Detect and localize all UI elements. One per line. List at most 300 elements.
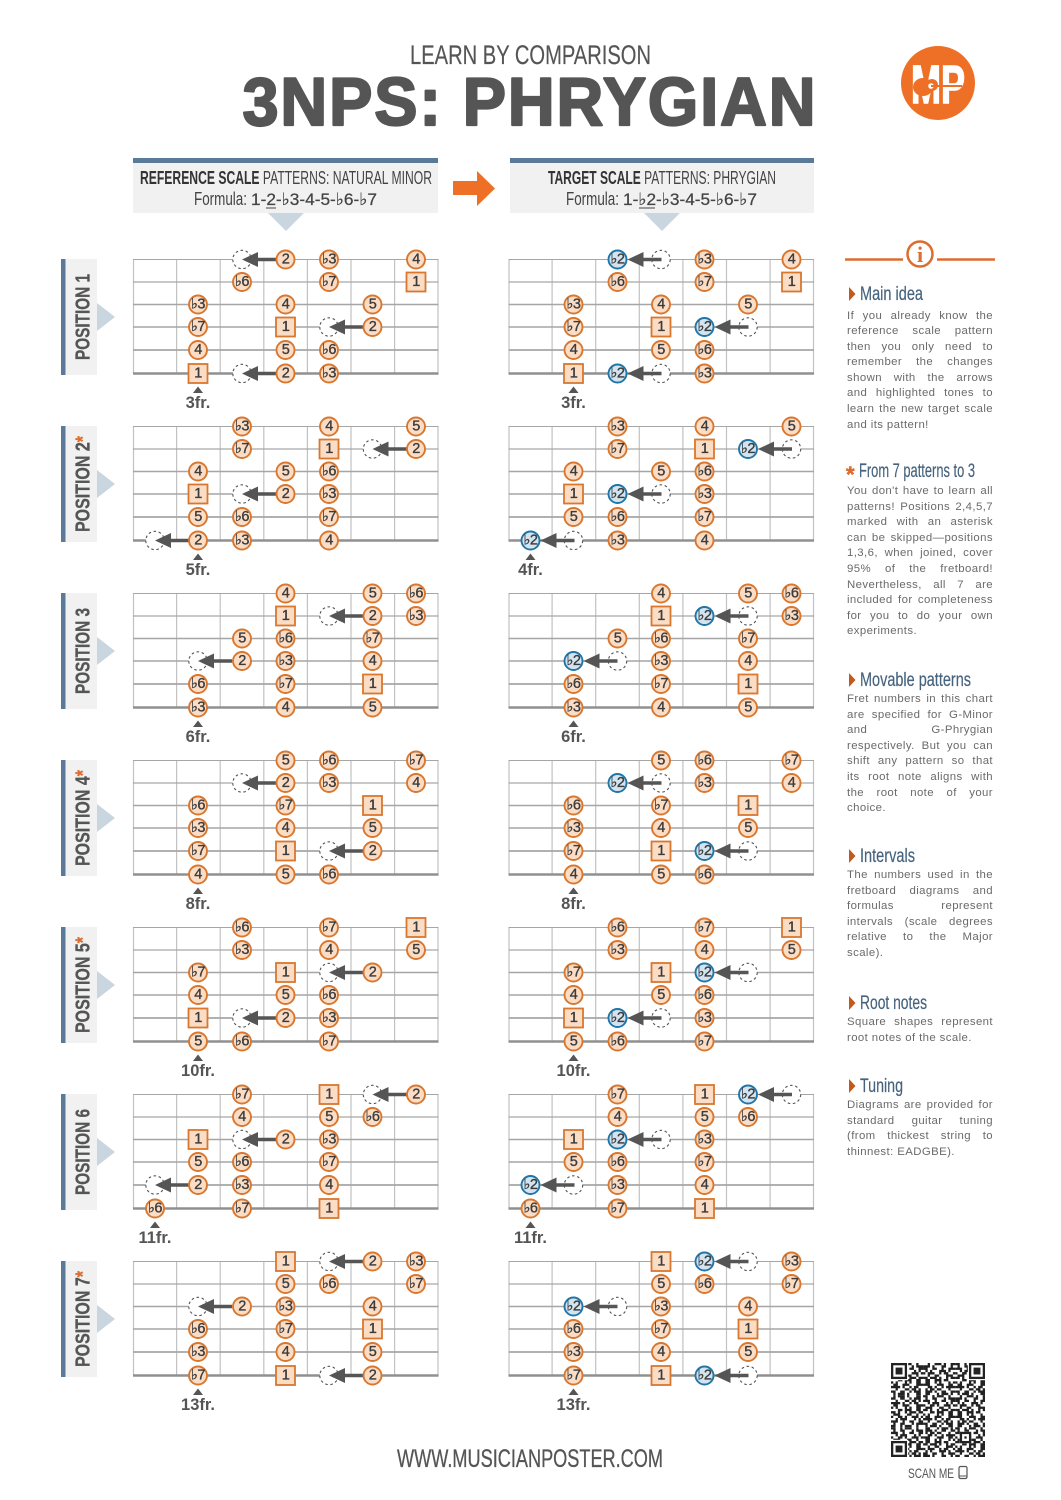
notes: ♭7 [191, 843, 205, 859]
notes: ♭2 [611, 1132, 625, 1148]
text: main idea: reference scale pattern [847, 325, 993, 337]
text: intervals: fretboard diagrams and [847, 885, 993, 897]
notes: ♭6 [611, 920, 625, 936]
notes: ♭2 [611, 366, 625, 382]
notes: ♭3 [611, 532, 625, 548]
notes: ♭7 [654, 676, 668, 692]
fret marker: 10fr. [557, 1062, 590, 1080]
text: intervals: scale). [847, 947, 883, 959]
panel: target scale header: Formula: [566, 189, 619, 209]
notes: 5 [282, 987, 290, 1003]
notes: 2 [369, 1368, 377, 1384]
notes: ♭6 [524, 1200, 538, 1216]
notes: 5 [788, 942, 796, 958]
fretboard: position 7 target [508, 1252, 814, 1414]
notes: ♭7 [698, 274, 712, 290]
notes: ♭2 [524, 1177, 538, 1193]
fretboard: position 4 target [508, 752, 814, 913]
position label 2: POSITION 2* [72, 436, 94, 532]
notes: 1 [282, 1368, 290, 1384]
notes: 4 [194, 866, 202, 882]
notes: 4 [701, 942, 709, 958]
notes: ♭6 [611, 274, 625, 290]
text: from 7 patterns to 3: marked with an asterisk [847, 516, 993, 528]
notes: ♭3 [235, 532, 249, 548]
heading: tuning [849, 1076, 903, 1097]
notes: 4 [282, 1344, 290, 1360]
notes: 5 [657, 464, 665, 480]
heading: from 7 patterns to 3 [846, 461, 975, 487]
notes: ♭6 [698, 866, 712, 882]
position label 1 [61, 259, 115, 375]
panel: reference scale header [133, 158, 438, 231]
notes: ♭3 [409, 608, 423, 624]
notes: ♭3 [567, 1344, 581, 1360]
notes: 1 [744, 676, 752, 692]
text: movable patterns: respectively. But you can [847, 740, 993, 752]
notes: 1 [570, 1010, 578, 1026]
notes: ♭7 [698, 509, 712, 525]
text: root notes [847, 1016, 993, 1044]
notes: ♭6 [409, 586, 423, 602]
notes [146, 1085, 425, 1218]
notes: ♭3 [191, 296, 205, 312]
notes: 5 [744, 700, 752, 716]
notes: ♭6 [148, 1200, 162, 1216]
notes: ♭3 [322, 252, 336, 268]
notes: ♭7 [322, 920, 336, 936]
notes: ♭7 [567, 1368, 581, 1384]
notes: ♭6 [235, 1154, 249, 1170]
text: intervals: relative to the Major [847, 931, 993, 943]
notes: 4 [744, 1298, 752, 1314]
notes: ♭6 [191, 676, 205, 692]
notes: ♭7 [191, 964, 205, 980]
notes: ♭2 [611, 252, 625, 268]
text: movable patterns: Fret numbers in this chart [847, 693, 993, 705]
notes: 1 [325, 1086, 333, 1102]
notes: ♭6 [322, 752, 336, 768]
notes: ♭6 [698, 1276, 712, 1292]
text: intervals [847, 869, 993, 959]
notes: ♭7 [698, 1154, 712, 1170]
notes: ♭3 [191, 700, 205, 716]
notes: 4 [788, 775, 796, 791]
changed-note arrows [584, 607, 757, 670]
fret marker: 4fr. [518, 561, 543, 579]
notes: ♭2 [611, 1010, 625, 1026]
position label 7 [61, 1261, 115, 1377]
text: main idea: and its pattern! [847, 419, 929, 431]
notes: ♭6 [235, 509, 249, 525]
changed-note arrows [540, 1085, 801, 1194]
changed-note arrows [584, 1252, 757, 1385]
notes: 5 [282, 464, 290, 480]
notes: ♭7 [235, 441, 249, 457]
text: tuning [847, 1099, 993, 1158]
notes: 1 [282, 608, 290, 624]
heading: main idea: Main idea [860, 284, 923, 305]
text: root notes: Square shapes represent [847, 1016, 993, 1028]
notes: 4 [282, 820, 290, 836]
notes: 4 [657, 586, 665, 602]
fret marker: 8fr. [186, 895, 210, 913]
notes: ♭6 [611, 509, 625, 525]
notes: ♭3 [322, 1010, 336, 1026]
notes: ♭3 [698, 1132, 712, 1148]
text: root notes: root notes of the scale. [847, 1032, 972, 1044]
notes: 5 [744, 820, 752, 836]
notes: 2 [282, 1010, 290, 1026]
notes: 1 [657, 1368, 665, 1384]
notes: 4 [194, 464, 202, 480]
fretboard: position 2 reference [133, 418, 438, 579]
notes: ♭3 [611, 942, 625, 958]
notes: ♭3 [698, 252, 712, 268]
notes [564, 752, 800, 884]
notes: ♭3 [322, 775, 336, 791]
notes: 1 [282, 843, 290, 859]
fretboard: position 2 target [508, 418, 814, 579]
notes: 1 [282, 964, 290, 980]
notes: ♭2 [741, 441, 755, 457]
changed-note arrows [540, 440, 801, 550]
fretboard: position 1 target [508, 250, 814, 412]
fret marker: 10fr. [181, 1062, 215, 1080]
notes: 1 [369, 676, 377, 692]
notes: 4 [412, 252, 420, 268]
position label 7: POSITION 7* [72, 1271, 94, 1367]
text: from 7 patterns to 3: patterns! Positions 2,4,5,7 [847, 501, 993, 513]
notes: 5 [701, 1109, 709, 1125]
QR code [890, 1362, 987, 1458]
notes: 5 [744, 1344, 752, 1360]
notes: 5 [657, 987, 665, 1003]
notes: 4 [282, 586, 290, 602]
text: from 7 patterns to 3: experiments. [847, 625, 917, 637]
notes: 4 [369, 653, 377, 669]
notes: 4 [282, 700, 290, 716]
notes: ♭7 [322, 1034, 336, 1050]
position label 5: POSITION 5* [72, 937, 94, 1033]
notes: ♭6 [235, 1034, 249, 1050]
fret marker: 6fr. [186, 728, 210, 746]
position label 1: POSITION 1 [72, 274, 94, 360]
notes: 4 [325, 1177, 333, 1193]
notes: ♭3 [235, 418, 249, 434]
notes: 1 [412, 274, 420, 290]
text: from 7 patterns to 3: for you to do your own [847, 610, 993, 622]
position label 2 [61, 426, 115, 542]
notes: ♭7 [322, 1154, 336, 1170]
notes: 1 [194, 1132, 202, 1148]
heading: intervals: Intervals [860, 846, 915, 867]
notes: ♭6 [611, 1034, 625, 1050]
notes: ♭7 [567, 964, 581, 980]
notes: 4 [570, 987, 578, 1003]
notes: 5 [570, 1154, 578, 1170]
notes: 1 [570, 366, 578, 382]
notes: ♭6 [322, 987, 336, 1003]
notes: ♭2 [611, 486, 625, 502]
notes: ♭3 [235, 1177, 249, 1193]
fretboard: position 3 reference [133, 584, 438, 746]
notes: 2 [412, 1086, 420, 1102]
notes: ♭2 [698, 319, 712, 335]
heading: main idea [849, 284, 923, 305]
notes: 4 [657, 700, 665, 716]
notes [564, 584, 800, 716]
notes: 5 [194, 1034, 202, 1050]
notes: 5 [369, 820, 377, 836]
notes: 1 [369, 1321, 377, 1337]
fret marker: 3fr. [561, 394, 586, 412]
notes: 2 [282, 252, 290, 268]
notes: ♭2 [611, 775, 625, 791]
notes: ♭3 [191, 1344, 205, 1360]
panel: reference scale header: Formula: [194, 189, 247, 209]
panel: target scale header [510, 158, 814, 231]
notes: ♭7 [785, 1276, 799, 1292]
heading: from 7 patterns to 3: * [846, 462, 855, 487]
notes: ♭7 [611, 441, 625, 457]
notes: ♭7 [279, 798, 293, 814]
notes: ♭6 [322, 1276, 336, 1292]
notes: 5 [614, 630, 622, 646]
notes: 5 [412, 942, 420, 958]
text: movable patterns [847, 693, 993, 814]
notes: ♭6 [698, 752, 712, 768]
notes: 5 [282, 866, 290, 882]
notes: 1 [657, 608, 665, 624]
notes: 5 [369, 296, 377, 312]
notes: ♭3 [654, 653, 668, 669]
notes: ♭7 [567, 319, 581, 335]
fret marker: 5fr. [186, 561, 210, 579]
notes: 5 [412, 418, 420, 434]
notes: 5 [325, 1109, 333, 1125]
text: tuning: Diagrams are provided for [847, 1099, 993, 1111]
notes: ♭3 [698, 486, 712, 502]
notes: ♭7 [654, 1321, 668, 1337]
notes: 5 [744, 296, 752, 312]
notes [189, 752, 425, 884]
notes: ♭3 [567, 700, 581, 716]
notes [564, 250, 801, 383]
panel: target scale header: 1-♭2-♭3-4-5-♭6-♭7 [623, 190, 757, 209]
notes: 4 [194, 342, 202, 358]
text: tuning: thinnest: EADGBE). [847, 1146, 955, 1158]
notes: 5 [657, 342, 665, 358]
notes: 5 [369, 700, 377, 716]
changed-note arrows [189, 607, 363, 670]
notes: 2 [369, 964, 377, 980]
notes: ♭7 [741, 630, 755, 646]
notes: ♭7 [409, 1276, 423, 1292]
position label 3 [61, 593, 115, 709]
notes: ♭7 [191, 319, 205, 335]
fretboard: position 5 reference [133, 918, 438, 1080]
notes: ♭3 [322, 366, 336, 382]
notes: 5 [570, 1034, 578, 1050]
notes: 4 [657, 1344, 665, 1360]
notes: 4 [614, 1109, 622, 1125]
notes: 2 [369, 319, 377, 335]
notes: 4 [325, 532, 333, 548]
notes: 1 [325, 1200, 333, 1216]
notes: ♭3 [191, 820, 205, 836]
fretboard: position 3 target [508, 584, 814, 746]
position label 3: POSITION 3 [72, 608, 94, 694]
notes: ♭6 [698, 342, 712, 358]
notes: ♭3 [235, 942, 249, 958]
notes: 5 [194, 509, 202, 525]
notes: 1 [701, 441, 709, 457]
notes: 4 [282, 296, 290, 312]
heading: root notes [849, 993, 927, 1014]
text: from 7 patterns to 3: Nevertheless, all 7 are [847, 579, 993, 591]
notes: ♭2 [741, 1086, 755, 1102]
notes: ♭7 [279, 676, 293, 692]
text: from 7 patterns to 3: can be skipped—positions [847, 532, 993, 544]
notes: 4 [744, 653, 752, 669]
notes [564, 918, 801, 1050]
notes: 5 [369, 1344, 377, 1360]
notes: 2 [282, 775, 290, 791]
notes: 5 [570, 509, 578, 525]
position label 5 [61, 927, 115, 1043]
notes: 5 [657, 866, 665, 882]
notes: 2 [282, 486, 290, 502]
changed-note arrows [628, 774, 757, 860]
notes: ♭6 [366, 1109, 380, 1125]
heading: from 7 patterns to 3: From 7 patterns to 3 [859, 461, 975, 482]
icon: info divider [845, 242, 995, 267]
notes: ♭7 [785, 752, 799, 768]
notes: ♭6 [322, 866, 336, 882]
changed-note arrows [628, 963, 757, 1027]
notes: 2 [194, 1177, 202, 1193]
text: main idea: and highlighted tones to [847, 387, 993, 399]
notes: ♭7 [698, 1034, 712, 1050]
notes: ♭3 [567, 820, 581, 836]
notes: ♭6 [654, 630, 668, 646]
notes: ♭3 [698, 1010, 712, 1026]
notes: 2 [369, 608, 377, 624]
notes: 1 [788, 274, 796, 290]
changed-note arrows [233, 963, 363, 1027]
notes [188, 418, 425, 550]
notes: 4 [325, 942, 333, 958]
notes: 4 [412, 775, 420, 791]
notes: 1 [657, 1254, 665, 1270]
notes: 5 [282, 752, 290, 768]
text: main idea: then you only need to [847, 341, 993, 353]
notes [564, 1252, 800, 1385]
fretboard: position 6 target [508, 1085, 814, 1247]
text: main idea: learn the new target scale [847, 403, 993, 415]
notes: 4 [657, 296, 665, 312]
notes: 5 [369, 586, 377, 602]
notes: 4 [570, 866, 578, 882]
notes: ♭3 [611, 418, 625, 434]
notes: 1 [325, 441, 333, 457]
text: main idea [847, 310, 993, 431]
notes: 4 [657, 820, 665, 836]
notes: 1 [657, 319, 665, 335]
arrow: reference to target [453, 171, 495, 206]
fret marker: 13fr. [181, 1396, 215, 1414]
fret marker: 11fr. [138, 1229, 172, 1247]
notes: ♭6 [322, 342, 336, 358]
notes: 1 [194, 366, 202, 382]
scan me label: SCAN ME [908, 1465, 954, 1481]
text: movable patterns: the root note of your [847, 787, 993, 799]
text: movable patterns: shift any pattern so that [847, 755, 993, 767]
fret marker: 6fr. [561, 728, 586, 746]
fret marker: 3fr. [186, 394, 210, 412]
notes: 2 [194, 532, 202, 548]
notes: 4 [701, 532, 709, 548]
notes: ♭6 [567, 1321, 581, 1337]
notes: ♭3 [611, 1177, 625, 1193]
notes: ♭7 [191, 1368, 205, 1384]
notes: ♭2 [524, 532, 538, 548]
notes: 1 [369, 798, 377, 814]
notes: 1 [570, 1132, 578, 1148]
text: intervals: formulas represent [847, 900, 993, 912]
notes: 5 [744, 586, 752, 602]
notes: 5 [282, 342, 290, 358]
notes: 5 [788, 418, 796, 434]
notes [189, 584, 425, 716]
changed-note arrows [146, 440, 407, 550]
notes: 2 [412, 441, 420, 457]
notes: ♭7 [654, 798, 668, 814]
notes: ♭6 [611, 1154, 625, 1170]
notes: ♭7 [698, 920, 712, 936]
notes: ♭2 [698, 1368, 712, 1384]
notes: ♭7 [235, 1200, 249, 1216]
fretboard: position 6 reference [133, 1085, 438, 1247]
notes: 4 [194, 987, 202, 1003]
notes: 1 [744, 1321, 752, 1337]
text: movable patterns: its root note aligns with [847, 771, 993, 783]
text: intervals: The numbers used in the [847, 869, 993, 881]
text: main idea: If you already know the [847, 310, 993, 322]
changed-note arrows [233, 774, 363, 860]
notes: ♭6 [235, 920, 249, 936]
notes [188, 918, 426, 1050]
notes: ♭2 [698, 608, 712, 624]
notes: 1 [744, 798, 752, 814]
notes: ♭6 [567, 798, 581, 814]
notes: 4 [788, 252, 796, 268]
notes: ♭7 [611, 1200, 625, 1216]
footer url: WWW.MUSICIANPOSTER.COM [397, 1445, 663, 1473]
notes: ♭3 [567, 296, 581, 312]
notes: ♭7 [322, 274, 336, 290]
fretboard: position 5 target [508, 918, 814, 1080]
notes: 1 [701, 1086, 709, 1102]
notes: ♭3 [654, 1298, 668, 1314]
notes: 4 [701, 1177, 709, 1193]
changed-note arrows [189, 1252, 363, 1385]
notes: 5 [194, 1154, 202, 1170]
notes: ♭7 [567, 843, 581, 859]
notes: ♭6 [741, 1109, 755, 1125]
notes: ♭3 [322, 1132, 336, 1148]
